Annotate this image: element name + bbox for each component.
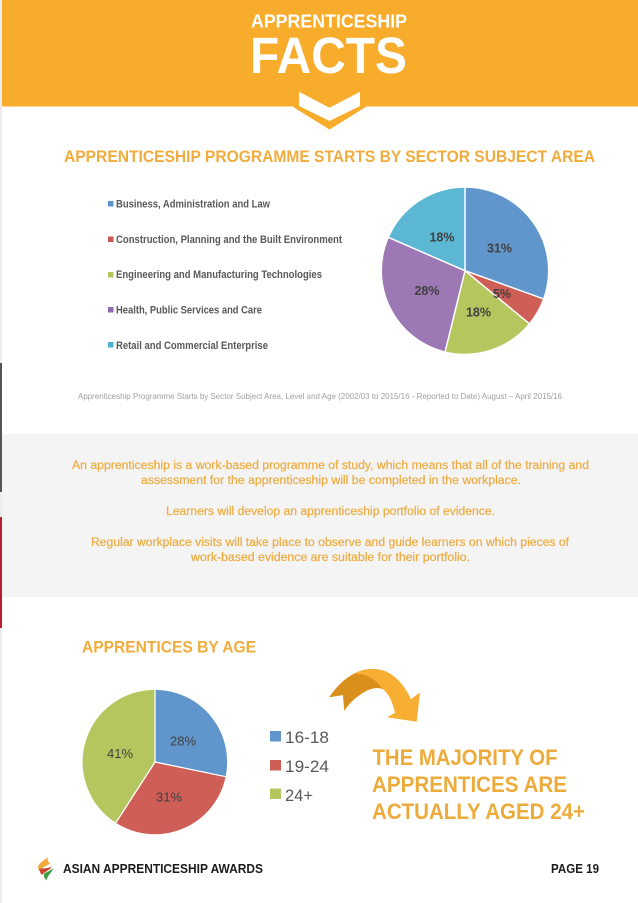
section heading: age: APPRENTICES BY AGE <box>82 638 256 656</box>
explanation text <box>72 460 589 564</box>
pie chart: age <box>82 689 228 835</box>
source note: Apprenticeship Programme Starts by Sector Subject Area, Level and Age (2002/03 to 2015/16 - Reported to Date) August – April 2015/16 <box>78 391 562 401</box>
legend: sectors: Health, Public Services and Care <box>116 304 262 316</box>
callout: ACTUALLY AGED 24+ <box>372 799 585 824</box>
footer: page number: PAGE 19 <box>551 862 599 876</box>
panel: explanation <box>2 434 638 597</box>
side tab: dark <box>0 363 2 492</box>
footer: organisation: ASIAN APPRENTICESHIP AWARDS <box>63 862 263 876</box>
explanation text: work-based evidence are suitable for their portfolio. <box>190 552 470 564</box>
legend: sectors: Construction, Planning and the Built Environment <box>116 234 342 246</box>
legend: sectors: Retail and Commercial Enterprise <box>116 340 268 352</box>
header title: FACTS <box>250 27 407 84</box>
legend: age: 16-18 <box>285 728 329 747</box>
pie chart: age: 28% <box>170 734 196 748</box>
callout: APPRENTICES ARE <box>372 772 567 797</box>
callout: THE MAJORITY OF <box>372 745 558 770</box>
header kicker: APPRENTICESHIP <box>251 10 407 32</box>
pie chart: sectors <box>381 187 549 354</box>
icon: curved arrow <box>329 669 420 722</box>
explanation text: assessment for the apprenticeship will be completed in the workplace. <box>141 475 521 487</box>
side tab: red <box>0 517 2 628</box>
explanation text: Regular workplace visits will take place to observe and guide learners on which pieces of <box>91 537 570 549</box>
explanation text: Learners will develop an apprenticeship portfolio of evidence. <box>166 506 495 518</box>
legend: age: 24+ <box>285 786 313 805</box>
pie chart: sectors: 18% <box>466 306 491 320</box>
icon: awards logo <box>38 857 53 880</box>
pie chart: age: 41% <box>107 746 133 761</box>
pie chart: sectors: 18% <box>429 230 455 244</box>
legend: age <box>270 728 329 805</box>
pie chart: age: 31% <box>156 790 182 804</box>
legend: age: 19-24 <box>285 757 329 776</box>
legend: sectors: Engineering and Manufacturing Technologies <box>116 269 322 281</box>
pie chart: sectors: 5% <box>493 287 511 301</box>
pie chart: sectors: 28% <box>414 284 440 298</box>
icon: chevron <box>299 92 360 121</box>
explanation text: An apprenticeship is a work-based programme of study, which means that all of the training and <box>72 460 589 472</box>
legend: sectors <box>108 198 342 352</box>
pie chart: sectors: 31% <box>487 242 512 256</box>
callout <box>372 745 585 824</box>
legend: sectors: Business, Administration and Law <box>116 198 270 210</box>
header banner <box>2 0 638 130</box>
section heading: sector: APPRENTICESHIP PROGRAMME STARTS BY SECTOR SUBJECT AREA <box>64 148 595 166</box>
